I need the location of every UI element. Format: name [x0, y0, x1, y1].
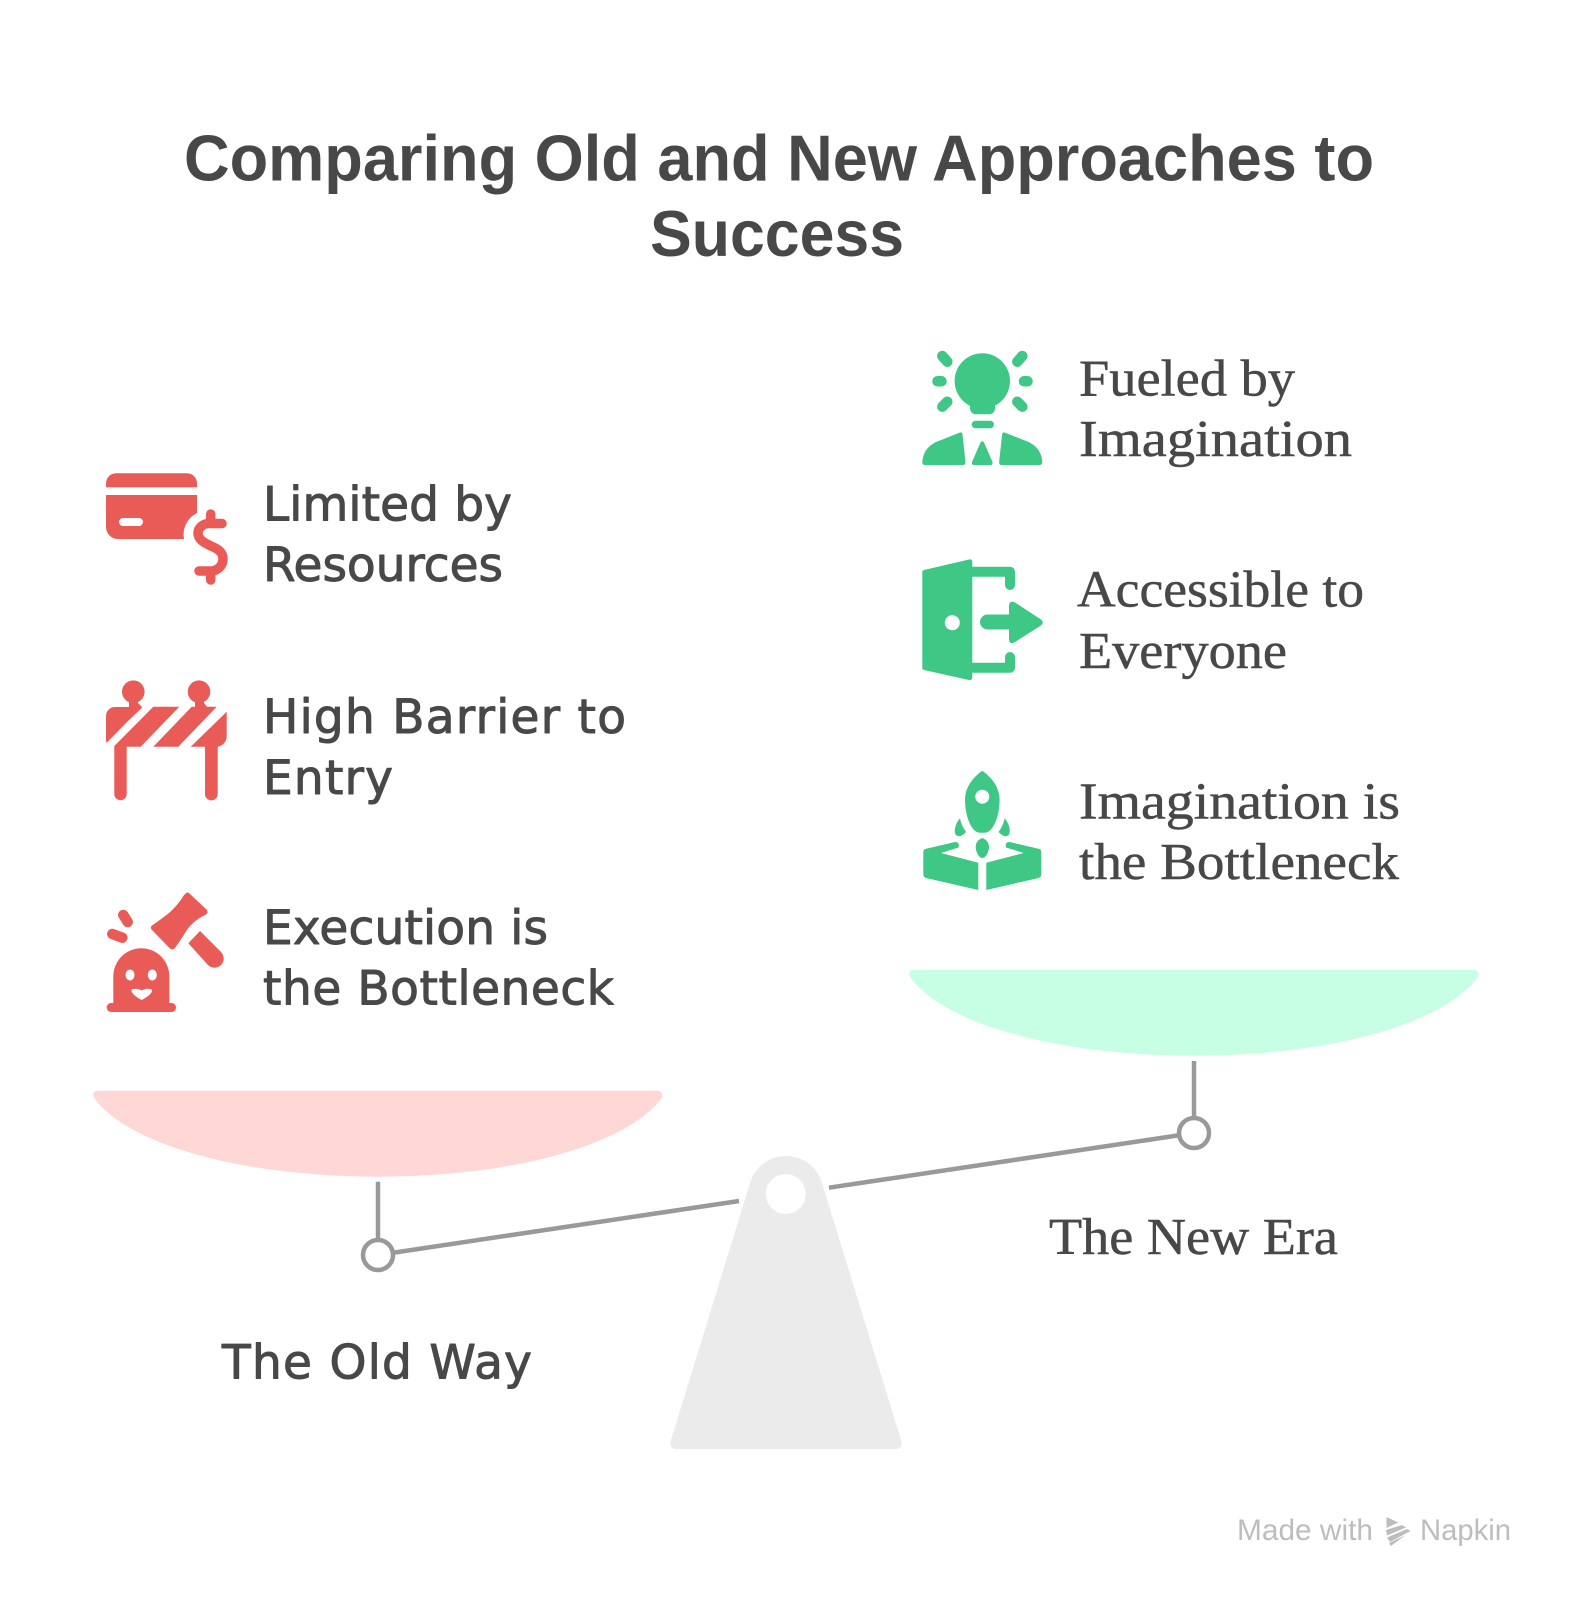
pan: new era: [909, 970, 1478, 1056]
text: Fueled by Imagination: Imagination: [1079, 411, 1352, 468]
text: High Barrier to Entry: [263, 690, 626, 806]
text: Accessible to Everyone: [1077, 562, 1364, 680]
text: Limited by Resources: Resources: [263, 538, 503, 593]
text: High Barrier to Entry: High Barrier to: [263, 690, 626, 745]
text: Fueled by Imagination: [1079, 350, 1352, 468]
text: Execution is the Bottleneck: the Bottleneck: [263, 962, 615, 1016]
pivot: old way: [363, 1240, 393, 1270]
footer: Made with Napkin: Made with: [1237, 1514, 1373, 1547]
footer: Made with Napkin: Napkin: [1420, 1514, 1511, 1547]
icon: napkin logo: [1386, 1517, 1410, 1546]
text: Imagination is the Bottleneck: Imagination is: [1079, 774, 1400, 830]
text: Execution is the Bottleneck: Execution is: [263, 901, 548, 956]
icon: gavel and alarm bell: [107, 893, 224, 1012]
text: Accessible to Everyone: Accessible to: [1077, 562, 1364, 618]
title: Success: [650, 197, 904, 270]
icon: open door with arrow: [922, 559, 1043, 680]
footer: Made with Napkin: [1237, 1514, 1511, 1547]
panel: the new era items: [922, 350, 1400, 891]
panel: the old way items: [106, 473, 626, 1016]
text: High Barrier to Entry: Entry: [263, 751, 393, 806]
text: Limited by Resources: [263, 478, 512, 593]
icon: rocket launching from box: [923, 771, 1041, 890]
scale beam: [378, 1061, 1194, 1253]
text: Imagination is the Bottleneck: the Bottleneck: [1079, 834, 1399, 891]
icon: road barrier: [106, 680, 227, 800]
pan: old way: [93, 1091, 662, 1177]
text: Fueled by Imagination: Fueled by: [1079, 350, 1295, 408]
text: Execution is the Bottleneck: [263, 901, 615, 1016]
label: The Old Way: The Old Way: [221, 1336, 532, 1390]
title: Comparing Old and New Approaches to: [184, 122, 1374, 194]
text: Limited by Resources: Limited by: [263, 478, 512, 532]
icon: credit card with dollar sign: [106, 473, 223, 580]
label: The New Era: The New Era: [1049, 1209, 1338, 1266]
text: Imagination is the Bottleneck: [1079, 774, 1400, 891]
title: [184, 122, 1374, 270]
pivot: new era: [1179, 1118, 1209, 1148]
icon: lightbulb head person: [922, 353, 1042, 465]
scale fulcrum: [671, 1156, 901, 1449]
text: Accessible to Everyone: Everyone: [1079, 623, 1287, 680]
